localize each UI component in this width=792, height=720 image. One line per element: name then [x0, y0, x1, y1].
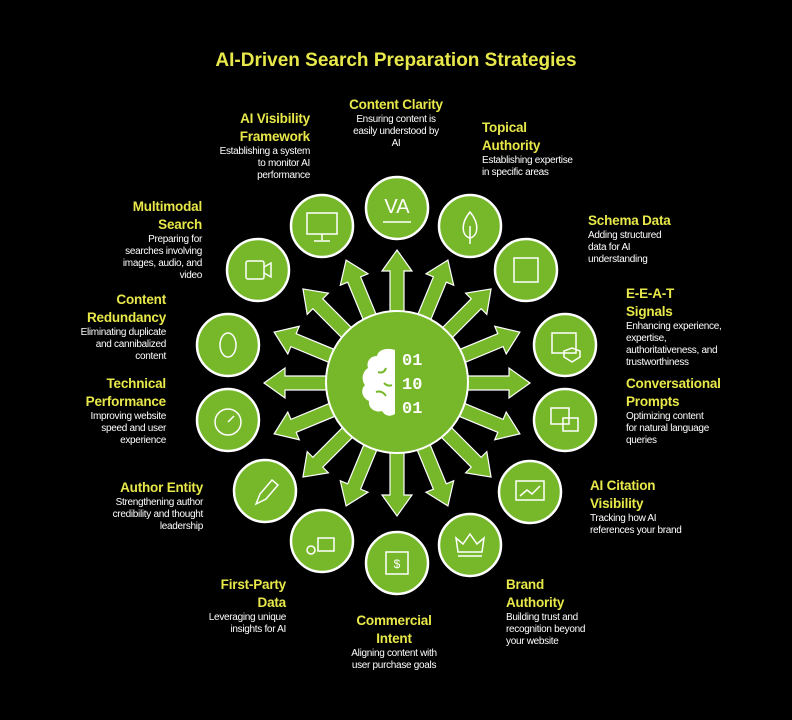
- text: multimodal: video: [180, 270, 202, 281]
- icon: technical: [197, 389, 259, 451]
- text: content clarity: [349, 97, 443, 149]
- icon: schema: [495, 239, 557, 301]
- text: topical authority: Establishing expertise: [482, 155, 573, 166]
- icon: ai visibility: [291, 195, 353, 257]
- text: technical: Improving website: [90, 411, 166, 422]
- text: ai citation: Tracking how AI: [590, 513, 656, 524]
- text: ai visibility: AI Visibility: [240, 111, 310, 126]
- text: redundancy: Content: [116, 292, 166, 307]
- text: topical authority: Authority: [482, 138, 540, 153]
- icon: commercial: [366, 532, 428, 594]
- icon: commercial: $: [394, 557, 401, 571]
- text: ai citation: references your brand: [590, 525, 682, 536]
- text: author entity: Strengthening author: [116, 497, 203, 508]
- text: ai visibility: to monitor AI: [258, 158, 310, 169]
- text: author entity: Author Entity: [120, 480, 203, 495]
- text: content clarity: easily understood by: [353, 126, 439, 137]
- text: conversational: queries: [626, 435, 657, 446]
- text: eeat: expertise,: [626, 333, 666, 344]
- text: ai visibility: performance: [257, 170, 310, 181]
- text: multimodal: Multimodal: [133, 199, 202, 214]
- text: author entity: [113, 480, 204, 532]
- center hub: 10: [402, 376, 422, 395]
- text: redundancy: [81, 292, 166, 362]
- text: author entity: leadership: [160, 521, 203, 532]
- text: multimodal: [123, 199, 202, 281]
- text: first-party: [209, 577, 286, 635]
- icon: ai citation: [499, 461, 561, 523]
- text: multimodal: searches involving: [125, 246, 202, 257]
- text: eeat: [626, 286, 721, 368]
- arrows: [264, 250, 530, 516]
- text: redundancy: Eliminating duplicate: [81, 327, 166, 338]
- text: ai visibility: Establishing a system: [220, 146, 310, 157]
- text: technical: experience: [120, 435, 166, 446]
- icon: author: [234, 460, 296, 522]
- text: redundancy: content: [135, 351, 166, 362]
- text: brand authority: Building trust and: [506, 612, 578, 623]
- text: commercial intent: Commercial: [356, 613, 432, 628]
- text: multimodal: images, audio, and: [123, 258, 202, 269]
- text: brand authority: Brand: [506, 577, 544, 592]
- text: technical: [86, 376, 166, 446]
- text: author entity: credibility and thought: [113, 509, 203, 520]
- text: commercial intent: user purchase goals: [352, 660, 436, 671]
- text: schema data: understanding: [588, 254, 647, 265]
- text: eeat: Signals: [626, 304, 673, 319]
- text: first-party: First-Party: [221, 577, 286, 592]
- text: commercial intent: Aligning content with: [351, 648, 437, 659]
- center hub: 01: [402, 352, 422, 371]
- text: first-party: Data: [258, 595, 286, 610]
- icon: brand: [439, 514, 501, 576]
- icon: conversational: [534, 389, 596, 451]
- text: schema data: Schema Data: [588, 213, 671, 228]
- text: technical: speed and user: [101, 423, 166, 434]
- text: multimodal: Search: [158, 217, 202, 232]
- text: conversational: Optimizing content: [626, 411, 703, 422]
- text: brand authority: Authority: [506, 595, 564, 610]
- text: ai citation: Visibility: [590, 496, 643, 511]
- text: eeat: E-E-A-T: [626, 286, 674, 301]
- title: AI-Driven Search Preparation Strategies: [215, 50, 577, 71]
- text: content clarity: AI: [392, 138, 400, 149]
- text: eeat: authoritativeness, and: [626, 345, 717, 356]
- text: ai citation: AI Citation: [590, 478, 655, 493]
- text: conversational: for natural language: [626, 423, 709, 434]
- text: redundancy: Redundancy: [87, 310, 166, 325]
- text: topical authority: [482, 120, 573, 178]
- text: brand authority: your website: [506, 636, 559, 647]
- text: redundancy: and cannibalized: [96, 339, 166, 350]
- text: topical authority: in specific areas: [482, 167, 549, 178]
- text: eeat: Enhancing experience,: [626, 321, 721, 332]
- icon: multimodal: [227, 239, 289, 301]
- text: conversational: Conversational: [626, 376, 721, 391]
- text: content clarity: Content Clarity: [349, 97, 443, 112]
- icon: eeat: [534, 314, 596, 376]
- text: commercial intent: Intent: [376, 631, 412, 646]
- center hub: 01: [402, 400, 422, 419]
- text: ai citation: [590, 478, 682, 536]
- text: topical authority: Topical: [482, 120, 527, 135]
- icon: topical authority: [439, 195, 501, 257]
- text: schema data: Adding structured: [588, 230, 661, 241]
- text: first-party: Leveraging unique: [209, 612, 286, 623]
- text: content clarity: Ensuring content is: [356, 114, 436, 125]
- icon: content clarity: VA: [384, 196, 410, 218]
- text: commercial intent: [351, 613, 437, 671]
- text: ai visibility: Framework: [240, 129, 310, 144]
- icon: first-party: [291, 510, 353, 572]
- text: schema data: data for AI: [588, 242, 630, 253]
- text: brand authority: [506, 577, 585, 647]
- icon: content clarity: [366, 177, 428, 239]
- text: conversational: [626, 376, 721, 446]
- text: conversational: Prompts: [626, 394, 679, 409]
- text: ai visibility: [220, 111, 310, 181]
- center hub: [326, 311, 468, 453]
- text: schema data: [588, 213, 671, 265]
- text: first-party: insights for AI: [230, 624, 286, 635]
- text: technical: Technical: [107, 376, 166, 391]
- text: brand authority: recognition beyond: [506, 624, 585, 635]
- text: technical: Performance: [86, 394, 166, 409]
- text: multimodal: Preparing for: [148, 234, 202, 245]
- text: eeat: trustworthiness: [626, 357, 689, 368]
- icon: redundancy: [197, 314, 259, 376]
